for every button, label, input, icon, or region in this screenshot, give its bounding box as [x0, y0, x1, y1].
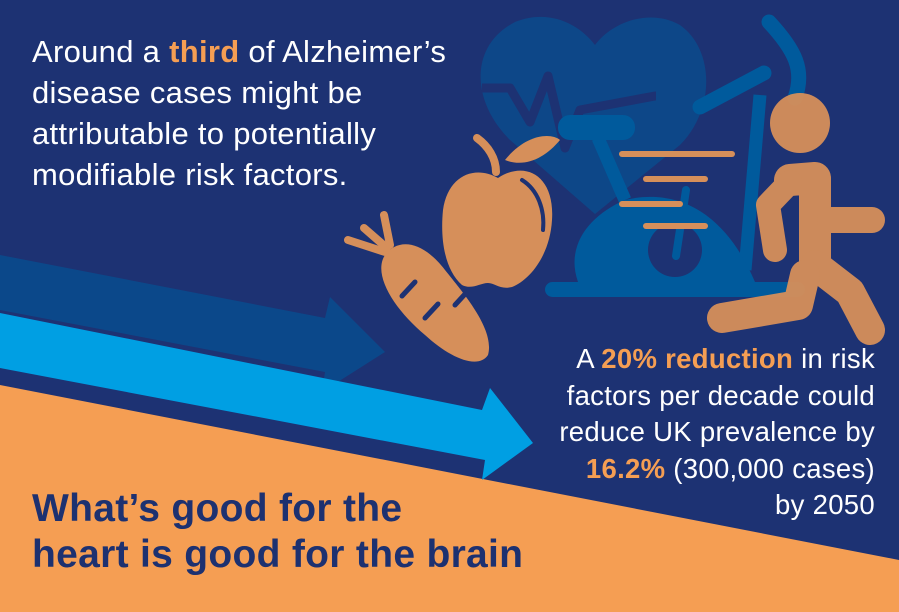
dark arrow: [0, 255, 385, 392]
light arrow: [0, 313, 533, 480]
icon: apple: [442, 136, 560, 288]
orange bottom region: [0, 385, 899, 612]
text: top-left statement: disease cases might be: [32, 75, 363, 110]
icon: carrot: [348, 215, 489, 362]
text: top-left statement: [32, 34, 446, 192]
icon: heart with ECG: [481, 17, 706, 214]
text: 20% reduction statement: [559, 343, 875, 520]
text: top-left statement: Around a third of Alzheimer’s: [32, 34, 446, 69]
text: 20% reduction statement: factors per decade could: [567, 380, 875, 410]
heading: heart/brain: What’s good for the: [32, 487, 402, 530]
text: top-left statement: modifiable risk factors.: [32, 157, 348, 192]
text: top-left statement: attributable to potentially: [32, 116, 376, 151]
heading: heart/brain: heart is good for the brain: [32, 533, 523, 576]
speed lines: [622, 154, 732, 226]
text: 20% reduction statement: 16.2% (300,000 cases): [586, 452, 875, 484]
text: 20% reduction statement: A 20% reduction in risk: [576, 343, 875, 374]
icon: runner: [722, 93, 872, 330]
text: 20% reduction statement: reduce UK prevalence by: [559, 416, 875, 447]
text: 20% reduction statement: by 2050: [775, 489, 875, 520]
heading: heart/brain: [32, 487, 523, 576]
icon: exercise bike: [545, 22, 805, 297]
